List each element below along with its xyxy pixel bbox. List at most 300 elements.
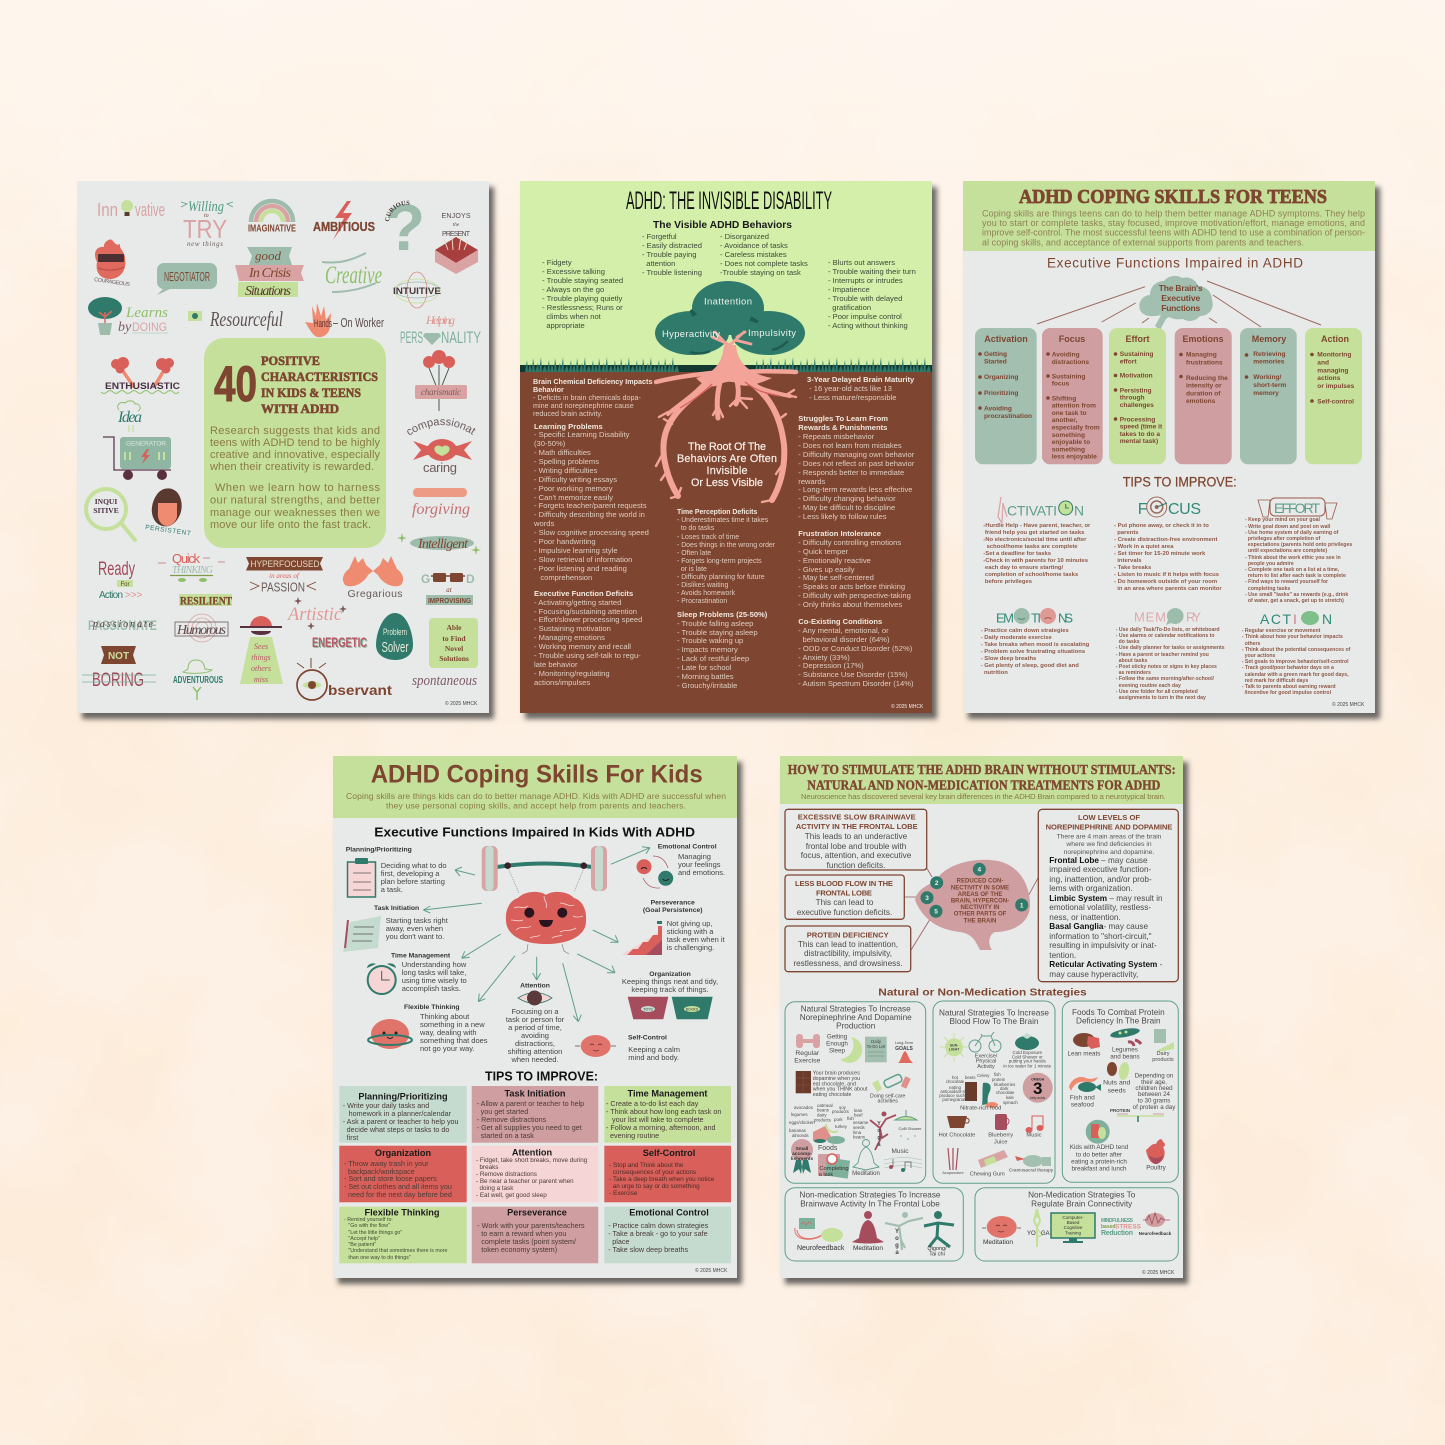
box: low levels of neurotransmitters: NOREPINEPHRINE AND DOPAMINE	[1046, 822, 1172, 831]
word art: enjoys the present: ENJOYS	[442, 213, 471, 220]
list: impulsive behaviors: - Blurts out answers - Trouble waiting their turn - Interrupts or intrudes - Impatience - Trouble with delayed gratification - Poor impulse control - Acting without thinking	[828, 258, 916, 330]
card: focus: Focus	[1059, 334, 1085, 344]
word art: willing to try new things: TRY	[183, 214, 227, 244]
icon: chocolate text: when you THINK about	[813, 1087, 868, 1093]
word art: persistent fist	[145, 488, 191, 537]
icon: meditation figure: Meditation	[853, 1245, 883, 1252]
card: focus: distractions	[1052, 359, 1089, 366]
title: ADHD COPING SKILLS FOR TEENS	[1019, 186, 1327, 208]
heading: natural strategies: Natural or Non-Medication Strategies	[878, 987, 1087, 999]
text: organization: Keeping things neat and tidy, keeping track of things.	[622, 977, 718, 994]
word art: spontaneous: spontaneous	[412, 673, 477, 689]
word art: emotions	[996, 608, 1073, 625]
word art: helping personality: Helping	[425, 313, 455, 327]
foods list: legumes	[791, 1112, 808, 1117]
word art: action	[1260, 611, 1332, 627]
word art: innovative: Inn	[97, 200, 118, 220]
icon: yoga figure light	[885, 1212, 923, 1256]
word art: good at improvising: at	[446, 586, 453, 594]
callout: 40 positive characteristics: Research suggests that kids and	[210, 425, 380, 437]
word art: good at improvising: D	[466, 572, 475, 586]
callout: 40 positive characteristics: creative and innovative, especially	[210, 449, 380, 461]
icon: nitrate-rich food: eating	[949, 1085, 961, 1090]
icon: dairy: Dairy	[1156, 1051, 1170, 1057]
tips: task initiation: - Allow a parent or teacher to help you get started - Remove distractions - Get all supplies you need to get started on a task	[477, 1099, 584, 1140]
word art: willing to try new things: new things	[187, 240, 223, 248]
text: learning problems: Learning Problems	[534, 422, 603, 431]
text: kids protein: eating a protein-rich	[1071, 1158, 1127, 1165]
title	[788, 762, 1176, 792]
icon: moon and sleep	[826, 1033, 862, 1063]
word art: not boring: NOT	[108, 651, 129, 662]
card headings: Task Initiation	[504, 1089, 566, 1099]
foods list: fish	[847, 1116, 854, 1121]
word art: sees things others miss UFO: others	[251, 664, 271, 673]
text: emotional control: Managing your feelings and emotions.	[678, 852, 725, 877]
word art: learns by doing tree: by	[118, 320, 132, 335]
foods list: eggs/chicken	[789, 1120, 815, 1125]
icon: yoga figure: g	[877, 1135, 881, 1141]
icon: stairs and flag	[621, 921, 662, 955]
word art: action: ACT	[1260, 611, 1291, 627]
icon: meditation outline	[852, 1140, 880, 1177]
icon: omega 3: 3	[1033, 1079, 1042, 1098]
header band	[963, 181, 1375, 251]
icon: sunlight: SUN-	[950, 1044, 959, 1048]
text: time management: Understanding how long tasks will take, using time wisely to accomplish tasks.	[402, 960, 467, 993]
word art: not boring	[82, 646, 156, 691]
icon: chewing gum	[970, 1150, 1008, 1178]
word art: enjoys the present	[435, 213, 478, 274]
icon: brain diagram	[915, 860, 1030, 950]
icon: blueberry juice: Juice	[994, 1139, 1007, 1145]
icon: nitrate-rich food: beets	[965, 1075, 976, 1080]
panel: protein foods: Deficiency In The Brain	[1076, 1016, 1161, 1025]
text: protein per day: to 30 grams	[1138, 1097, 1170, 1104]
foods list: products	[832, 1109, 850, 1114]
word art: ready for action: Ready	[98, 559, 135, 580]
icon: dumbbell: Exercise	[794, 1058, 821, 1065]
card: effort: through	[1120, 395, 1145, 402]
panel: blood flow strategies: Blood Flow To The Brain	[950, 1017, 1039, 1026]
callout: 40 positive characteristics	[204, 338, 386, 548]
card headings: Flexible Thinking	[364, 1207, 440, 1217]
header band	[333, 756, 737, 818]
text: task initiation: Starting tasks right away, even when you don't want to.	[386, 916, 448, 941]
card: action: managing	[1317, 367, 1348, 374]
icon: legumes	[1110, 1026, 1141, 1060]
icon: acupuncture needles: Acupuncture	[942, 1171, 964, 1175]
card: effort: mental task)	[1120, 438, 1158, 445]
icon: yoga figure: a	[877, 1142, 881, 1148]
callout: 40 positive characteristics: WITH ADHD	[261, 401, 339, 416]
icon: craniosacral hands	[1009, 1155, 1054, 1174]
tips: time management: - Create a to-do list each day - Think about how long each task on your list will take to complete - Follow a morning, afternoon, and evening routine	[606, 1099, 721, 1140]
icon: bicycle: Exercise/	[975, 1054, 998, 1060]
text: time perception deficits: Time Perception Deficits - Underestimates time it takes to do tasks - Loses track of time - Does things in the wrong order - Often late - Forgets long-term projects or is late - Difficulty planning for future - Dislikes waiting - Avoids homework - Procrastination	[677, 509, 775, 605]
foods list: products	[814, 1118, 832, 1122]
icon: alarm clock	[367, 963, 396, 994]
card: effort: Persisting	[1120, 387, 1152, 394]
card: action: actions	[1317, 375, 1341, 382]
word art: ready for action	[98, 559, 143, 601]
box: low levels of neurotransmitters: LOW LEVELS OF	[1078, 813, 1140, 822]
icon: organization bins: TOYS	[643, 1008, 653, 1012]
icon: brain diagram: NECTIVITY IN SOME	[951, 885, 1009, 891]
text: executive function deficits: Executive Function Deficits	[534, 589, 633, 598]
icon: brain diagram: AREAS OF THE	[958, 892, 1002, 898]
word art: compassionate caring candy: compassionate	[407, 418, 476, 435]
icon: bicycle	[969, 1032, 1001, 1070]
heading: executive functions: Executive Functions Impaired in ADHD	[1047, 256, 1303, 271]
word art: ready for action: >>>	[125, 590, 143, 601]
word art: good in crisis situations: In Crisis	[248, 266, 292, 281]
word art: good in crisis situations	[235, 247, 304, 299]
word art: creative: Creative	[325, 262, 382, 289]
icon: fish and seafood: seafood	[1071, 1102, 1094, 1109]
word art: intelligent: Intelligent	[417, 537, 469, 552]
word art: charismatic roses: charismatic	[421, 387, 461, 397]
word art: effort banner	[1258, 498, 1337, 519]
icon: completing a task: a task	[819, 1172, 833, 1178]
panel: protein foods: Foods To Combat Protein	[1072, 1008, 1165, 1017]
card: emotions: Reducing the	[1186, 375, 1228, 382]
box: less blood flow: FRONTAL LOBE	[816, 889, 872, 898]
tree with roots: Impulsivity	[748, 328, 796, 339]
word art: compassionate caring candy	[407, 418, 476, 475]
icon: chocolate text: eating chocolate	[813, 1092, 851, 1098]
icon: bicycle: Physical	[976, 1059, 996, 1065]
panel: brain connectivity: Non-Medication Strategies To	[1028, 1191, 1136, 1200]
callout: 40 positive characteristics: 40	[214, 356, 257, 412]
icon: neurofeedback wave	[1139, 1213, 1172, 1236]
word art: energetic	[312, 634, 368, 651]
heading: visible behaviors: The Visible ADHD Behaviors	[653, 220, 792, 231]
text: protein per day: their age,	[1141, 1079, 1167, 1086]
icon: yoga figure light: o	[895, 1236, 899, 1242]
label: organization: Organization	[649, 971, 691, 978]
card: effort: Effort	[1126, 334, 1150, 344]
word art: intuitive atom	[393, 272, 441, 308]
icon: hot chocolate: Hot Chocolate	[939, 1133, 975, 1139]
word art: adventurous hat	[173, 660, 223, 700]
callout: 40 positive characteristics: When we learn how to harness	[215, 482, 380, 494]
word art: able to find novel solutions	[429, 618, 478, 668]
card: activation: Organizing	[984, 374, 1018, 381]
icon: yoga tree pose: GA	[1041, 1231, 1050, 1237]
panel: brainwave activity	[785, 1188, 963, 1261]
word art: memory: RY	[1186, 610, 1201, 625]
word art: memory: MEM	[1134, 610, 1166, 625]
icon: nitrate-rich food: spinach	[1003, 1100, 1018, 1105]
foods list: pork	[834, 1117, 843, 1122]
tips: activation: -Hurdle Help - Have parent, teacher, or friend help you get started on tasks -No electronics/social time until after school/home tasks are complete -Set a deadline for tasks -Check in with parents for 10 minutes each day to ensure starting/ completion of school/home tasks before privileges	[983, 523, 1090, 585]
icon: cold exposure	[1003, 1033, 1052, 1068]
text: rewards and punishments: Struggles To Learn From Rewards & Punishments - Repeats misbehavior - Does not learn from mistakes - Difficulty managing own behavior - Does not reflect on past behavior - Responds better to immediate rewards - Long-term rewards less effective - Difficulty changing behavior - May be difficult to discipline - Less likely to follow rules	[798, 414, 914, 521]
title: NATURAL AND NON-MEDICATION TREATMENTS FOR ADHD	[807, 777, 1161, 792]
header band	[780, 756, 1183, 804]
card headings: Organization	[375, 1148, 431, 1158]
callout: root of behaviors: The Root Of The	[688, 441, 766, 453]
word art: helping personality: NALITY	[441, 328, 481, 347]
card: memory	[1240, 328, 1297, 464]
icon: dairy: products	[1152, 1057, 1174, 1063]
icon: long-term goals: Long-Term	[895, 1041, 913, 1045]
word art: innovative	[97, 200, 165, 220]
word art: hands-on worker	[305, 303, 384, 337]
card headings: Emotional Control	[629, 1207, 709, 1217]
copyright: © 2025 MHCK	[445, 700, 478, 707]
foods list: sesame	[853, 1120, 869, 1125]
word art: learns by doing tree: DOING	[132, 320, 167, 334]
word art: observant eye: bservant	[328, 682, 392, 698]
word art: humorous	[175, 614, 228, 642]
text: slow brainwave body: This leads to an underactive frontal lobe and trouble with focus, attention, and executive function deficits.	[801, 832, 911, 870]
foods list: beans	[817, 1108, 830, 1112]
card: action	[1305, 328, 1362, 464]
card: effort: takes to do a	[1120, 431, 1160, 438]
icon: nitrate-rich food: blueberries	[994, 1082, 1015, 1087]
word art: sees things others miss UFO: things	[251, 653, 271, 662]
card: activation: Avoiding	[984, 405, 1012, 412]
icon: craniosacral hands: Craniosacral therapy	[1009, 1168, 1054, 1174]
box: low levels of neurotransmitters	[1038, 809, 1178, 982]
icon: completing a task	[818, 1154, 850, 1179]
text: sleep problems: Sleep Problems (25-50%)	[677, 610, 767, 619]
word art: emotions: EM	[996, 610, 1014, 625]
icon: cold exposure: Cold Exposure	[1013, 1050, 1043, 1055]
word art: passionate: PASSIONATE	[88, 617, 157, 633]
text: kids protein: breakfast and lunch	[1072, 1165, 1127, 1172]
icon: nitrate-rich food: Nitrate-rich food	[960, 1105, 1001, 1111]
card: focus: something	[1052, 432, 1085, 439]
word art: mindfulness based stress reduction: MINDFULNESS	[1101, 1218, 1134, 1224]
tips: self-control: - Stop and Think about the consequences of your actions - Take a deep breath when you notice an urge to say or do something - Exercise	[609, 1162, 714, 1197]
box: slow brainwave activity: EXCESSIVE SLOW BRAINWAVE	[798, 812, 916, 821]
intro text: al coping skills, and acceptance of external supports from parents and teachers.	[982, 238, 1304, 248]
word art: quick thinking: Quick	[172, 551, 200, 566]
panel: 40 positive characteristics	[77, 181, 489, 713]
arrows to functions	[423, 847, 650, 1022]
card: focus: another,	[1052, 417, 1078, 424]
icon: yoga figure: Y	[877, 1121, 881, 1127]
icon: brain tree: Executive	[1161, 293, 1200, 303]
icon: neurofeedback	[795, 1218, 845, 1252]
foods list: lima	[853, 1130, 862, 1135]
icon: self-care: Doing self-care	[870, 1093, 906, 1099]
icon: long-term goals	[895, 1041, 914, 1063]
grass band	[520, 357, 932, 372]
label: perseverance	[643, 899, 703, 914]
icon: nitrate-rich food: dark	[1000, 1086, 1009, 1091]
icon: meditation figure	[852, 1211, 884, 1252]
icon: music notes: Music	[1026, 1133, 1042, 1139]
word art: good at improvising	[421, 572, 475, 605]
word art: able to find novel solutions: Novel	[445, 644, 463, 653]
word art: hands-on worker: Hands	[314, 318, 332, 330]
icon: moon and sleep: Enough	[826, 1041, 848, 1048]
icon: brain diagram: 5	[934, 909, 938, 916]
copyright: © 2025 MHCK	[695, 1267, 728, 1274]
icon: smiling brain	[506, 892, 586, 954]
icon: calm brain	[575, 1035, 616, 1057]
icon: completing a task: Completing	[819, 1166, 849, 1172]
word art: activation: CTIVATI	[1007, 503, 1057, 519]
box: low levels of neurotransmitters: There are 4 main areas of the brain	[1057, 833, 1162, 840]
callout: 40 positive characteristics: when their creativity is rewarded.	[209, 461, 374, 473]
card: activation: Started	[984, 358, 1007, 365]
word art: inquisitive magnifier	[86, 489, 135, 540]
icon: eye	[518, 990, 552, 1006]
word art: able to find novel solutions: Able	[446, 623, 462, 632]
icon: task note	[343, 916, 381, 952]
word art: idea generator cart	[103, 401, 171, 480]
icon: chocolate text: eat chocolate, and	[813, 1081, 856, 1087]
foods list	[789, 1103, 869, 1140]
callout: root of behaviors: Or Less Visible	[691, 477, 763, 489]
icon: poultry: Poultry	[1146, 1164, 1167, 1171]
word art: effort banner: EFFORT	[1274, 500, 1320, 516]
word art: charismatic roses	[415, 350, 467, 411]
box: slow brainwave activity: ACTIVITY IN THE FRONTAL LOBE	[796, 822, 918, 831]
icon: nitrate-rich food	[939, 1072, 1018, 1111]
icon: computer-based cognitive training	[1051, 1213, 1095, 1243]
icon: sunlight	[940, 1033, 968, 1062]
icon: self-care: activities	[878, 1098, 898, 1104]
text: delayed brain maturity: 3-Year Delayed Brain Maturity - 16 year-old acts like 13 - Less mature/responsible	[807, 375, 914, 402]
word art: resilient: RESILIENT	[180, 596, 232, 608]
word art: energetic: ENERGETIC	[312, 634, 367, 650]
tips: memory: - Use daily Task/To-Do lists, or whiteboard - Use alarms or calendar notifications to do tasks - Use daily planner for tasks or assignments - Have a parent or teacher remind you about tasks - Post sticky notes or signs in key places as reminders - Follow the same morning/after-school/ evening routine each day - Use one folder for all completed assignments to turn in the next day	[1116, 627, 1225, 701]
word art: passionate: passionate	[92, 619, 154, 630]
label: emotional control: Emotional Control	[658, 843, 717, 850]
tip cards	[339, 1086, 731, 1263]
icon: brain diagram: NECTIVITY IN	[961, 905, 999, 911]
icon: nuts and seeds: seeds	[1108, 1087, 1126, 1094]
label: perseverance: Perseverance	[651, 899, 695, 906]
word art: resourceful	[188, 307, 283, 331]
icon: omega 3	[1023, 1073, 1053, 1103]
card: emotions: Managing	[1186, 352, 1217, 359]
card: emotions: emotions	[1186, 398, 1216, 405]
panel: ADHD coping skills for teens	[963, 181, 1375, 713]
panel: brain connectivity	[975, 1188, 1178, 1261]
word art: sees things others miss UFO	[240, 616, 283, 684]
icon: blueberry juice: Blueberry	[988, 1133, 1013, 1139]
word art: adventurous hat: ADVENTUROUS	[173, 675, 223, 686]
icon: brain tree: Functions	[1161, 303, 1200, 313]
word art: quick thinking: THINKING	[172, 565, 213, 576]
card: emotions	[1175, 328, 1232, 464]
word art: artistic	[286, 597, 347, 630]
foods list: soy	[839, 1105, 847, 1110]
copyright: © 2025 MHCK	[891, 703, 924, 710]
icon: neurofeedback wave: Neurofeedback	[1139, 1231, 1172, 1236]
icon: omega 3: OMEGA	[1031, 1078, 1045, 1082]
callout: 40 positive characteristics: IN KIDS & TEENS	[261, 385, 361, 400]
callout: 40 positive characteristics: POSITIVE	[261, 353, 320, 368]
foods list: avocados	[794, 1105, 814, 1110]
tips: emotions: - Practice calm down strategies - Daily moderate exercise - Take breaks when mood is escalating - Problem solve frustrating situations - Slow deep breaths - Get plenty of sleep, good diet and nutrition	[981, 628, 1089, 676]
tree with roots: Hyperactivity	[662, 329, 720, 340]
intro text: Coping skills are things kids can do to better manage ADHD. Kids with ADHD are successful when	[346, 791, 726, 801]
copyright: © 2025 MHCK	[1142, 1269, 1175, 1276]
callout: 40 positive characteristics: manage our weaknesses then we	[210, 507, 380, 519]
card: effort: speed (time it	[1120, 424, 1163, 431]
text: kids protein: Kids with ADHD tend	[1070, 1144, 1129, 1151]
title: HOW TO STIMULATE THE ADHD BRAIN WITHOUT STIMULANTS:	[788, 762, 1176, 777]
subtitle: Neuroscience has discovered several key brain differences in the ADHD Brain compared to a neurotypical brain.	[801, 792, 1166, 801]
text: flexible thinking: Thinking about something in a new way, dealing with something that does not go your way.	[420, 1012, 488, 1053]
card headings: Perseverance	[507, 1207, 567, 1217]
icon: dairy	[1152, 1029, 1174, 1063]
text: four brain areas: Frontal Lobe – may cause impaired executive function- ing, inattention, and/or prob- lems with organization. Limbic System – may result in emotional volatility, restless- ness, or inattention. Basal Ganglia- may cause information to "short-circuit," resulting in impulsivity or inat- tention. Reticular Activating System - may cause hyperactivity,	[1049, 856, 1163, 979]
box: slow brainwave activity	[785, 809, 927, 870]
icon: foods: Foods	[818, 1145, 838, 1152]
tips: perseverance: - Work with your parents/teachers to earn a reward when you complete tasks (point system/ token economy system)	[477, 1221, 585, 1254]
heading: executive functions: Executive Functions Impaired In Kids With ADHD	[374, 826, 695, 840]
word art: imaginative rainbow	[248, 201, 296, 234]
word art: ready for action: For	[120, 582, 130, 588]
icon: fish and seafood	[1069, 1077, 1101, 1109]
word art: creative	[322, 253, 382, 292]
icon: brain diagram: REDUCED CON-	[957, 879, 1003, 885]
word art: intelligent	[397, 533, 481, 555]
card: memory: Memory	[1252, 334, 1286, 344]
word art: problem solver: Solver	[382, 639, 408, 656]
box: less blood flow	[785, 875, 904, 919]
card: activation	[975, 328, 1037, 464]
foods list: seeds	[853, 1125, 866, 1130]
icon: dumbbell	[794, 1034, 821, 1065]
heading: tips to improve: TIPS TO IMPROVE:	[1123, 474, 1237, 490]
word art: negotiator speech bubble: NEGOTIATOR	[164, 269, 210, 284]
card headings: Time Management	[628, 1089, 708, 1099]
word art: idea generator cart: GENERATOR	[126, 440, 166, 448]
icon: computer-based cognitive training: Cognitive	[1064, 1225, 1083, 1230]
icon: organization bins	[628, 997, 713, 1019]
title: ADHD Coping Skills For Kids	[371, 761, 703, 789]
text: self-control: Keeping a calm mind and body.	[628, 1045, 680, 1062]
word art: compassionate caring candy: caring	[423, 460, 457, 475]
card: action: and	[1317, 360, 1329, 366]
card headings: Attention	[512, 1147, 553, 1157]
icon: brain diagram: 3	[925, 895, 929, 902]
word art: focus: CUS	[1168, 501, 1201, 518]
box: less blood flow: LESS BLOOD FLOW IN THE	[795, 879, 893, 888]
icon: small accomplishments ribbon	[791, 1139, 814, 1174]
intro text	[982, 209, 1365, 248]
panel: ADHD coping skills for kids	[333, 756, 737, 1278]
word art: willing to try new things: Willing	[188, 199, 224, 215]
word art: ready for action: Action	[99, 590, 123, 601]
icon: nitrate-rich food: hot	[952, 1075, 959, 1080]
box: protein deficiency	[785, 926, 911, 972]
icon: brain diagram: OTHER PARTS OF	[954, 912, 1007, 918]
card: action: or impulses	[1317, 383, 1355, 390]
text: protein per day: between 24	[1138, 1091, 1171, 1098]
label: self-control: Self-Control	[628, 1034, 667, 1041]
list: hyperactive behaviors: - Fidgety - Excessive talking - Trouble staying seated - Always on the go - Trouble playing quietly - Restlessness; Runs or climbs when not appropriate	[540, 258, 623, 330]
icon: nitrate-rich food: kale	[1006, 1095, 1014, 1100]
icon: protein scale	[1110, 1108, 1164, 1122]
tree with roots	[655, 281, 805, 502]
icon: to-do list: Daily	[871, 1039, 882, 1044]
text: protein per day: Depending on	[1135, 1073, 1174, 1080]
card: effort: Sustaining	[1120, 351, 1153, 358]
word art: not boring: BORING	[92, 670, 144, 691]
foods list: oatmeal	[817, 1103, 833, 1108]
